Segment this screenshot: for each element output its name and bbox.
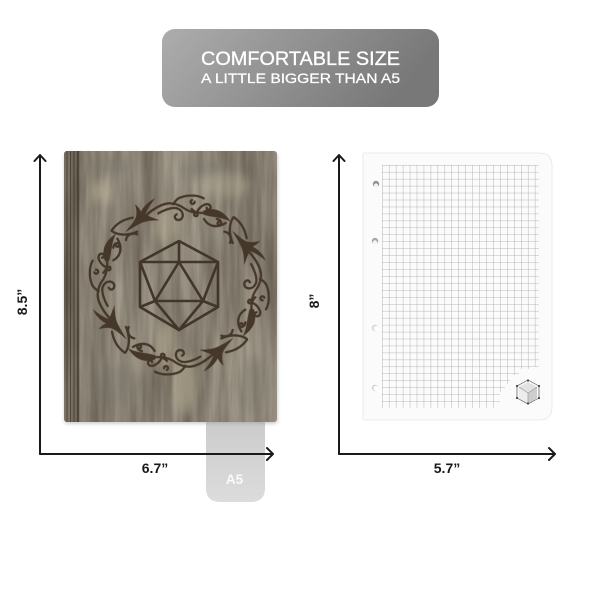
icon: cube logo: [517, 380, 539, 404]
wood texture: [64, 151, 277, 422]
wooden notebook cover: [64, 151, 278, 424]
label: book height: 8.5”: [14, 289, 30, 315]
left width axis arrow: [40, 448, 273, 460]
left height axis arrow: [34, 155, 46, 454]
label: sheet width: 5.7”: [434, 460, 460, 476]
graph paper refill sheet: [363, 153, 552, 420]
right height axis arrow: [334, 155, 344, 454]
banner: comfortable size: [162, 29, 439, 107]
A5 size tab: [206, 420, 265, 502]
label: sheet height: 8”: [306, 294, 322, 308]
banner heading: COMFORTABLE SIZE: [201, 49, 400, 70]
banner subheading: A LITTLE BIGGER THAN A5: [201, 70, 400, 86]
A5 label: A5: [226, 472, 244, 487]
grid lines: [382, 165, 539, 408]
grid corner cut-out: [498, 367, 540, 409]
spine: [64, 151, 79, 422]
label: book width: 6.7”: [142, 460, 168, 476]
wreath engraving: [90, 196, 269, 374]
right width axis arrow: [339, 448, 555, 460]
icon: d20 die: [140, 241, 218, 330]
infographic canvas: [18, 29, 556, 502]
punched holes: [372, 181, 379, 391]
